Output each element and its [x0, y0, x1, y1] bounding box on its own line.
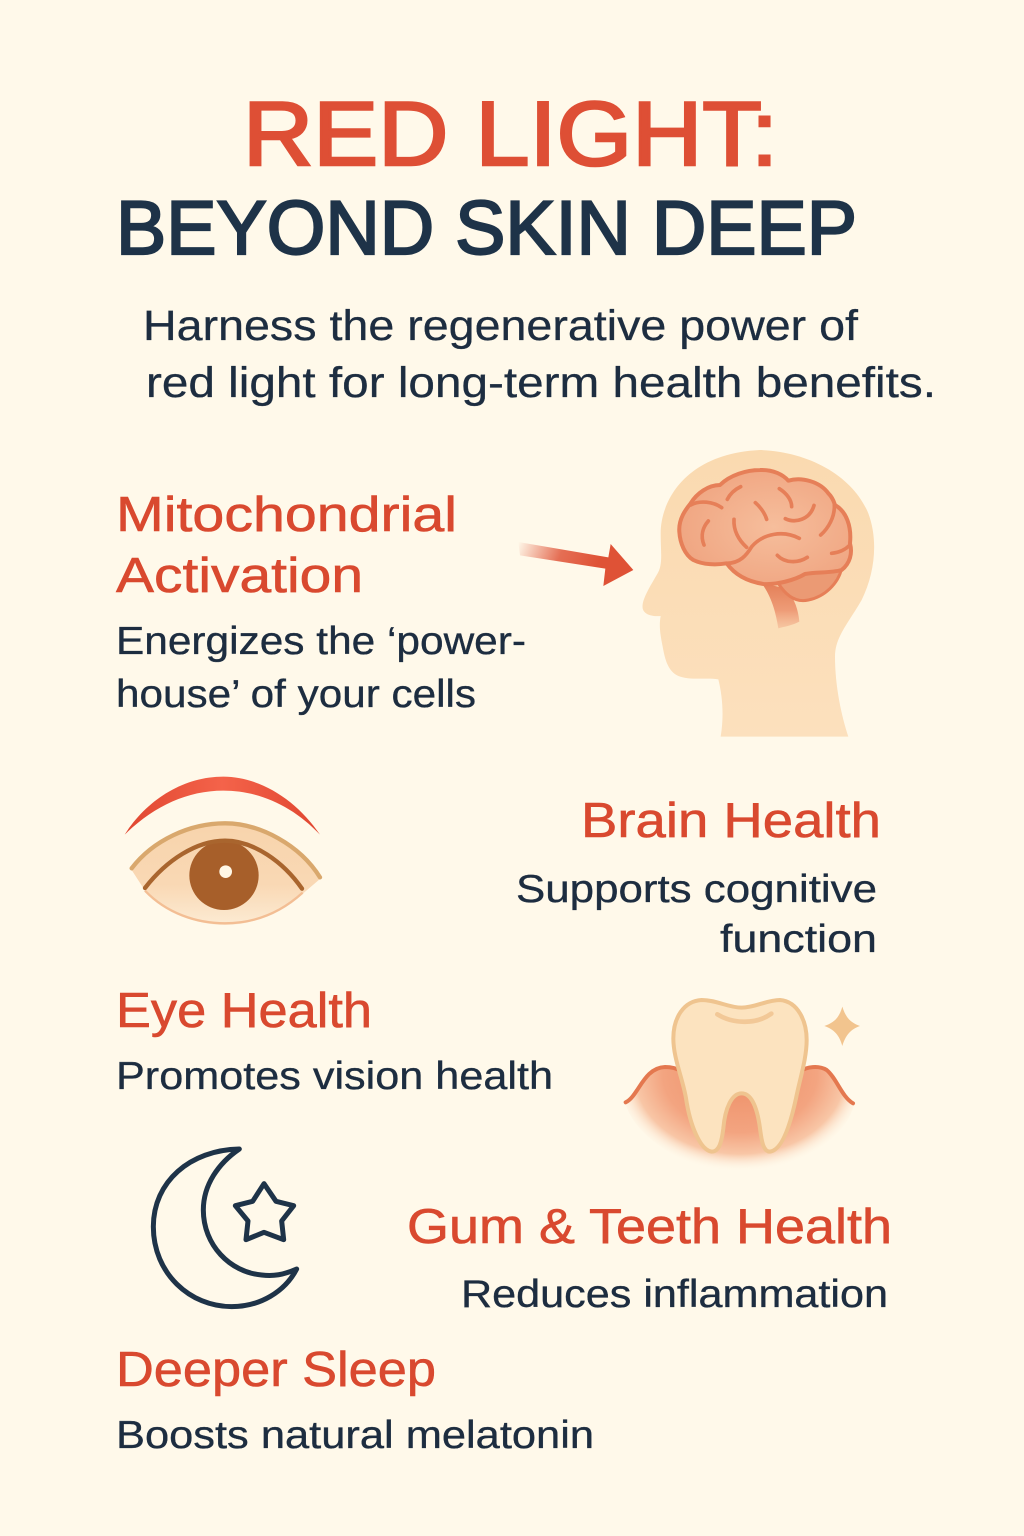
red brow arc [125, 777, 320, 835]
icon: tooth and gums [625, 1000, 860, 1172]
icon: head with brain [643, 450, 874, 737]
text: brain health description: Supports cognitive [516, 868, 877, 911]
subtitle: red light for long-term health benefits. [146, 359, 936, 407]
heading: Brain Health: Brain Health [581, 794, 881, 848]
text: sleep description: Boosts natural melatonin [116, 1414, 594, 1457]
subtitle: Harness the regenerative power of [143, 302, 859, 350]
title: Beyond Skin Deep: BEYOND SKIN DEEP [116, 186, 857, 271]
title: Red Light: RED LIGHT: [243, 84, 778, 185]
gum glow [625, 1067, 854, 1172]
cerebellum [778, 568, 842, 601]
sparkle [824, 1007, 860, 1046]
heading: Eye Health: Eye Health [116, 984, 372, 1038]
icon: crescent moon and star [153, 1149, 297, 1307]
heading: Mitochondrial Activation: Activation [116, 549, 363, 603]
lower lid [145, 891, 303, 923]
upper lid [132, 823, 320, 877]
tooth crease [717, 1014, 771, 1022]
head silhouette [643, 450, 874, 737]
text: gum description: Reduces inflammation [461, 1273, 888, 1316]
brain stem [762, 583, 799, 628]
text: eye health description: Promotes vision health [116, 1055, 553, 1098]
arrow: red light pointing at head [518, 542, 633, 586]
brain folds [691, 487, 850, 563]
heading: Deeper Sleep: Deeper Sleep [116, 1343, 436, 1397]
eye body [132, 823, 321, 925]
text: brain health description [516, 868, 877, 961]
icon: eye [125, 777, 321, 925]
section: Brain Health [516, 794, 881, 961]
iris [189, 841, 259, 910]
heading: Mitochondrial Activation [116, 488, 457, 603]
crease [145, 841, 302, 889]
heading: Gum & Teeth Health: Gum & Teeth Health [407, 1200, 892, 1254]
star [235, 1184, 294, 1240]
gum lines [626, 1067, 853, 1103]
text: mitochondrial description [116, 620, 526, 716]
pupil highlight [219, 865, 232, 878]
brain [679, 470, 851, 584]
subtitle [143, 302, 936, 407]
text: mitochondrial description: Energizes the ‘power- [116, 620, 526, 663]
section: Deeper Sleep [116, 1343, 594, 1457]
section: Gum and Teeth Health [407, 1200, 892, 1316]
text: brain health description: function [720, 918, 877, 961]
heading: Mitochondrial Activation: Mitochondrial [116, 488, 457, 542]
text: mitochondrial description: house’ of your cells [116, 673, 476, 716]
tooth [673, 1000, 807, 1152]
section: Eye Health [116, 984, 553, 1098]
section: Mitochondrial Activation [116, 488, 526, 716]
crescent [153, 1149, 297, 1307]
